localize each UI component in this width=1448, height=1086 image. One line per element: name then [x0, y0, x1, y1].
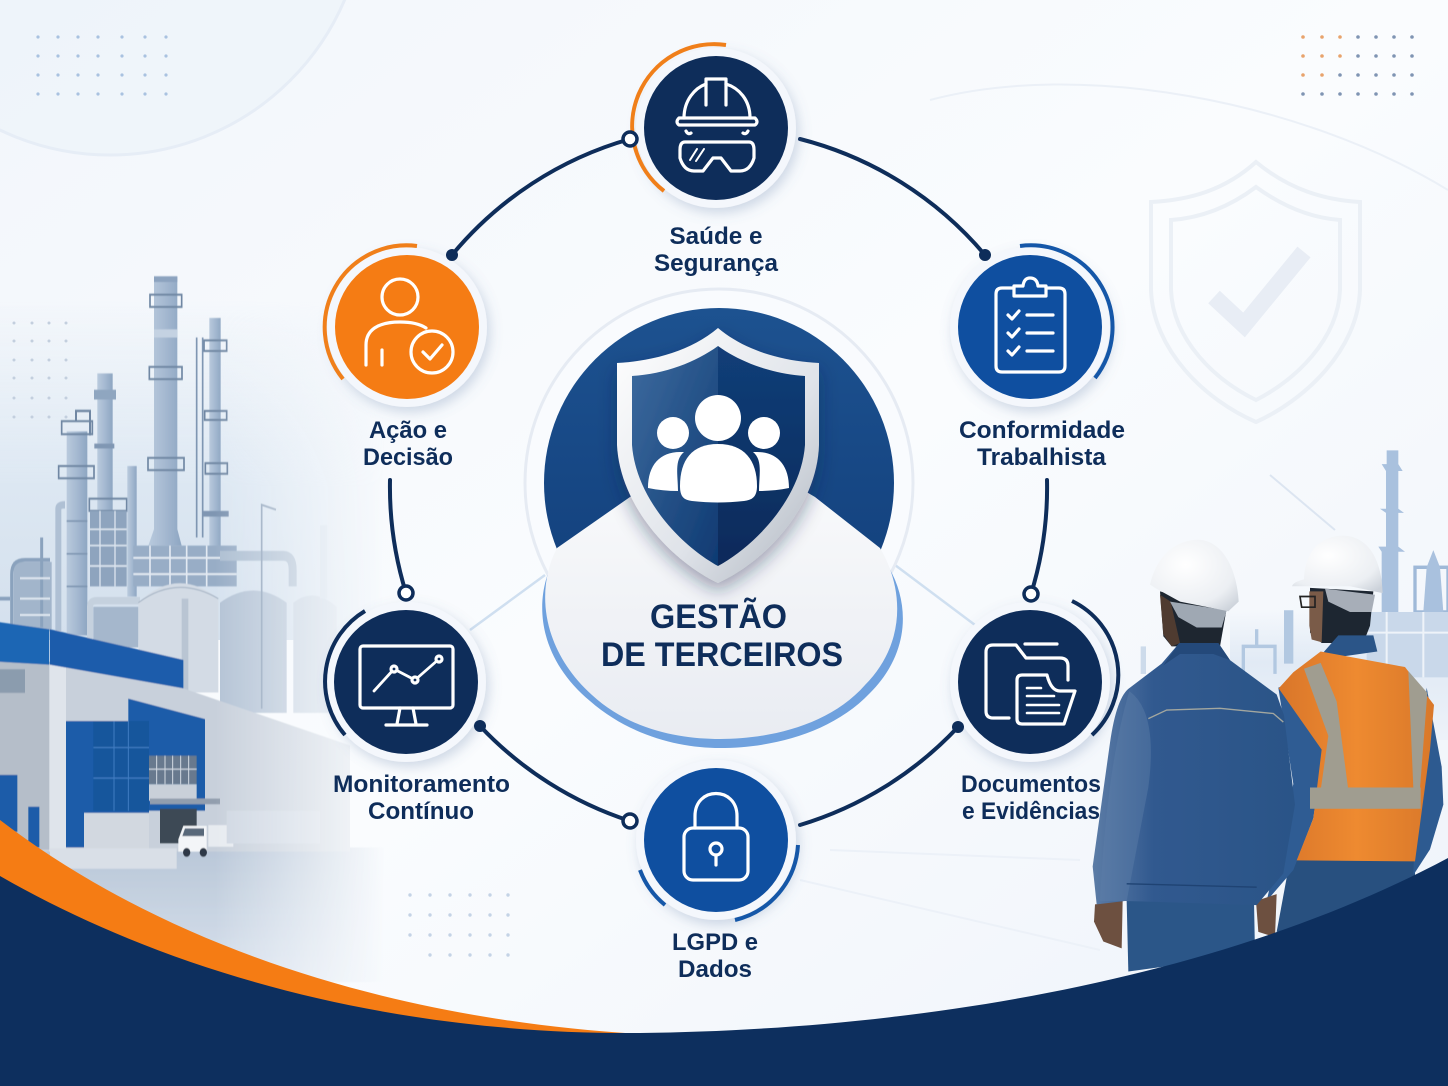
label: Ação e [369, 417, 447, 444]
dot grid: top left [36, 35, 168, 96]
node: Conformidade Trabalhista [950, 245, 1125, 471]
blue facade [66, 699, 205, 848]
illustration: two workers [1093, 536, 1443, 971]
process base [133, 546, 237, 586]
central hub [525, 289, 913, 748]
blue disc [544, 308, 894, 658]
label [961, 771, 1101, 825]
label: Conformidade [959, 417, 1125, 444]
label: Documentos [961, 771, 1101, 798]
tallest tower [148, 276, 182, 546]
lens rim [542, 446, 903, 748]
node: Saúde e Segurança [632, 44, 796, 277]
label: Decisão [363, 444, 453, 471]
dot grid: top right [1301, 35, 1414, 96]
label: Contínuo [368, 798, 474, 825]
title: DE TERCEIROS [601, 636, 843, 674]
label [654, 223, 779, 277]
third tower [97, 373, 113, 577]
label: Dados [678, 956, 752, 983]
slim tower with ladder [209, 318, 221, 559]
left process unit [13, 562, 52, 631]
label: Monitoramento [333, 771, 510, 798]
icon: padlock [684, 794, 748, 880]
dot grid: bottom centre [408, 893, 510, 957]
wide tower [67, 431, 87, 635]
ring connectors [390, 139, 1047, 825]
title: GESTÃO [650, 598, 787, 636]
label: Saúde e [670, 223, 762, 250]
title [601, 598, 843, 674]
label [363, 417, 453, 471]
wall [42, 667, 350, 852]
lens panel [545, 440, 897, 739]
connector end dots [399, 132, 1038, 828]
label [672, 929, 758, 983]
label: Segurança [654, 250, 779, 277]
label [333, 771, 510, 825]
watermark shield [1151, 162, 1360, 422]
node: Ação e Decisão [325, 245, 487, 471]
blue roof band [0, 622, 49, 665]
distant equipment [226, 825, 234, 844]
illustration: refinery and factory building [0, 276, 400, 982]
orange swoosh [0, 820, 640, 1034]
icon: three people [648, 395, 789, 502]
tanks [220, 590, 287, 713]
icon: clipboard checklist [996, 278, 1065, 372]
node: Documentos e Evidências [950, 601, 1118, 825]
lamp post [262, 505, 276, 709]
node: Monitoramento Contínuo [325, 602, 510, 825]
node: LGPD e Dados [636, 760, 798, 983]
label: Trabalhista [977, 444, 1107, 471]
icon: monitor with line chart [360, 646, 453, 725]
icon: folder and document [986, 644, 1075, 724]
vehicles [208, 825, 233, 847]
worker right [1267, 536, 1443, 932]
dot grid: left [12, 322, 68, 418]
icon: person with check [366, 279, 453, 373]
shield [617, 328, 819, 583]
worker left [1093, 540, 1295, 971]
label [959, 417, 1125, 471]
illustration: distant refinery right [1141, 450, 1448, 740]
icon: helmet and goggles [677, 79, 757, 171]
navy footer wave [0, 858, 1448, 1086]
halo ring [525, 289, 913, 677]
label: e Evidências [962, 798, 1100, 825]
label: LGPD e [672, 929, 758, 956]
